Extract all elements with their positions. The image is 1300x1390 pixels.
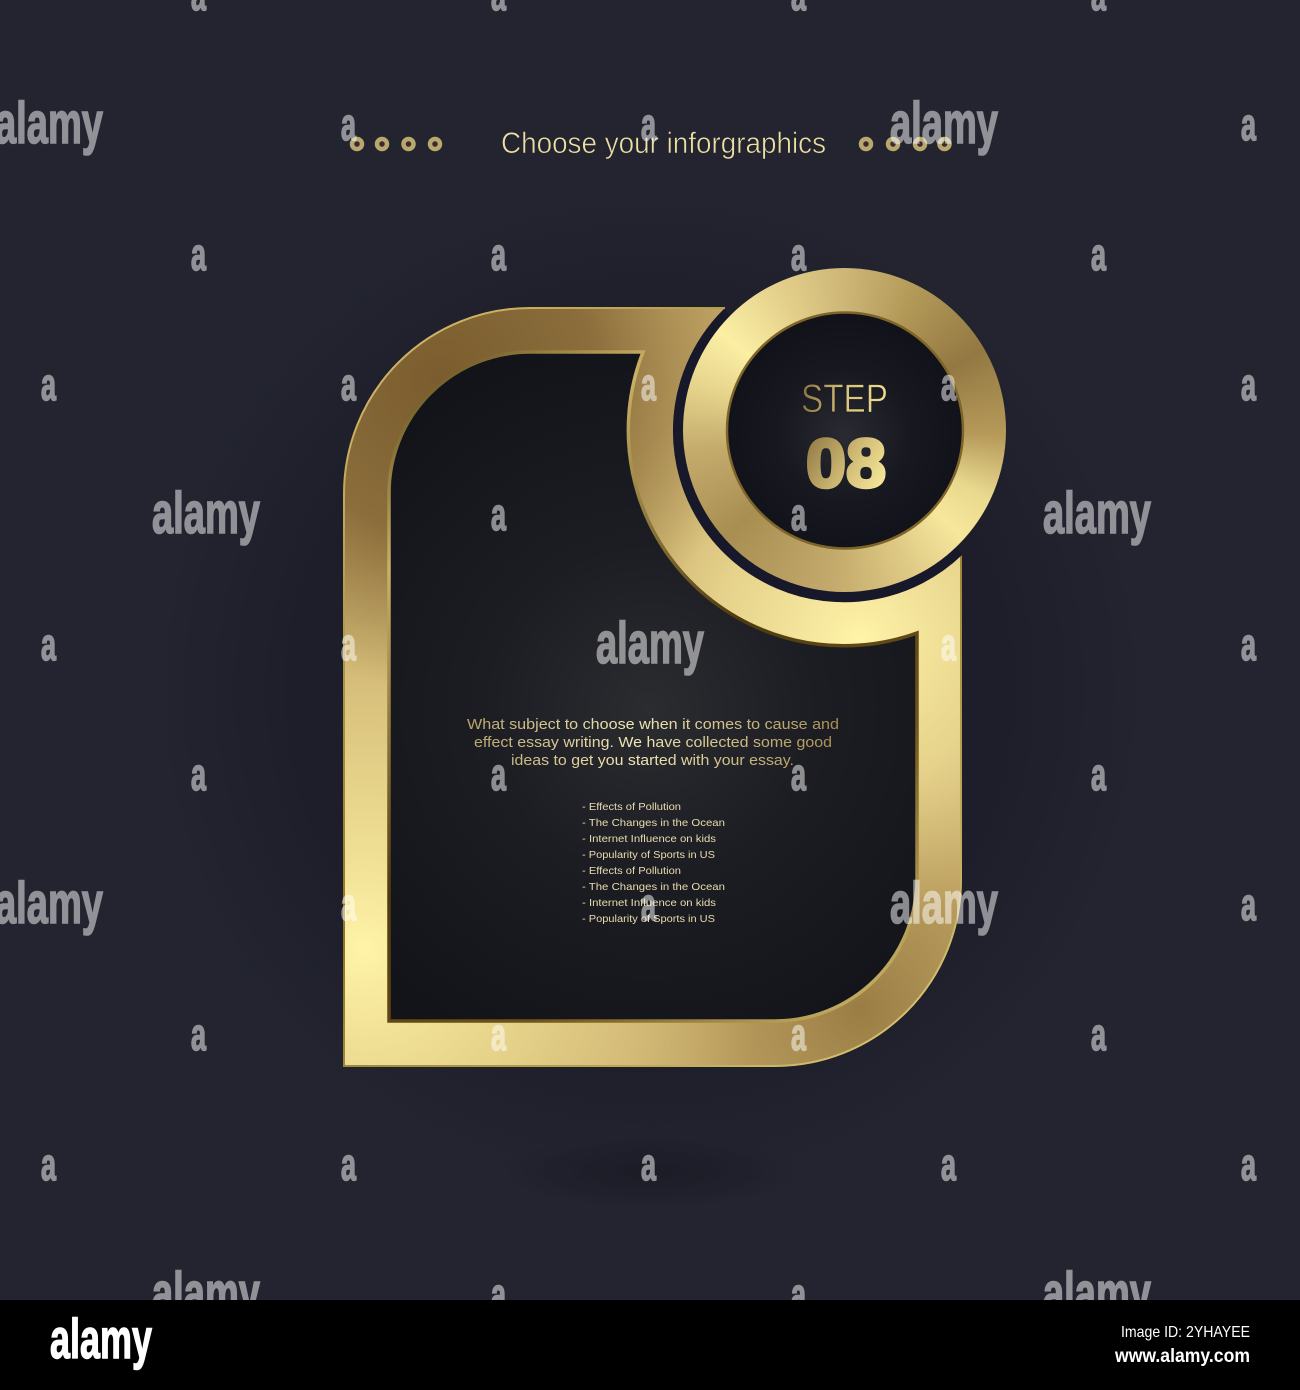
watermark: stock photo marks: a (1091, 229, 1107, 280)
watermark: stock photo marks: a (191, 229, 207, 280)
watermark: stock photo marks: a (491, 749, 507, 800)
watermark: stock photo marks: alamy (152, 481, 260, 546)
gold frame (340, 300, 970, 1070)
frame inner bevel (389, 352, 917, 1021)
watermark: stock photo marks: alamy (890, 871, 998, 936)
topic list: - The Changes in the Ocean (582, 881, 725, 893)
watermark: stock photo marks: alamy (890, 91, 998, 156)
watermark: stock photo marks: a (1091, 1009, 1107, 1060)
watermark: stock photo marks: a (791, 1009, 807, 1060)
watermark: stock photo marks: a (1241, 879, 1257, 930)
footer logo: alamy (50, 1307, 152, 1370)
watermark: stock photo marks: a (1241, 99, 1257, 150)
footer bar (0, 1300, 1300, 1390)
watermark: stock photo marks: a (491, 229, 507, 280)
description paragraph: ideas to get you started with your essay. (511, 753, 794, 769)
watermark: stock photo marks: a (941, 619, 957, 670)
watermark: stock photo marks: a (191, 1009, 207, 1060)
topic list: - Effects of Pollution (582, 801, 681, 813)
watermark: stock photo marks: a (41, 359, 57, 410)
description paragraph: What subject to choose when it comes to cause and (467, 717, 839, 733)
watermark: stock photo marks: a (791, 749, 807, 800)
website: www.alamy.com (1114, 1346, 1250, 1367)
heading row (352, 127, 950, 160)
watermark: stock photo marks: a (341, 619, 357, 670)
watermark: stock photo marks: a (41, 1139, 57, 1190)
watermark: stock photo marks: a (341, 99, 357, 150)
watermark: stock photo marks: a (1241, 359, 1257, 410)
image id: Image ID: 2YHAYEE (1121, 1324, 1250, 1341)
watermark: stock photo marks: a (491, 1009, 507, 1060)
left dots (352, 139, 440, 149)
watermark: stock photo marks: a (491, 1269, 507, 1320)
ground shadow (480, 1130, 820, 1214)
gap ring (678, 313, 959, 597)
topic list (582, 801, 725, 925)
topic list: - Internet Influence on kids (582, 833, 716, 845)
frame outer edge (344, 308, 961, 1066)
watermark: stock photo marks: a (641, 879, 657, 930)
watermark: stock photo marks: a (191, 749, 207, 800)
watermark: stock photo marks: a (1241, 619, 1257, 670)
topic list: - Internet Influence on kids (582, 897, 716, 909)
topic list: - Effects of Pollution (582, 865, 681, 877)
topic list: - The Changes in the Ocean (582, 817, 725, 829)
step label: STEP (801, 377, 888, 421)
watermark: stock photo marks: alamy (1043, 481, 1151, 546)
badge gold ring (683, 268, 1006, 592)
watermark: stock photo marks: alamy (596, 611, 704, 676)
badge: step number (683, 268, 1006, 592)
watermark: stock photo marks: a (641, 1139, 657, 1190)
watermark: stock photo marks: a (341, 359, 357, 410)
title: Choose your inforgraphics (501, 127, 826, 160)
right dots (861, 139, 950, 149)
badge centre disc (727, 312, 963, 548)
watermark: stock photo marks: a (1241, 1139, 1257, 1190)
watermark: stock photo marks: a (341, 1139, 357, 1190)
watermark: stock photo marks: a (941, 1139, 957, 1190)
watermark: stock photo marks: a (641, 99, 657, 150)
watermark: stock photo marks: alamy (1043, 1261, 1151, 1326)
panel: text frame (340, 300, 970, 1070)
watermark: stock photo marks: a (791, 1269, 807, 1320)
watermark: stock photo marks: a (791, 489, 807, 540)
topic list: - Popularity of Sports in US (582, 913, 715, 925)
description paragraph: effect essay writing. We have collected some good (474, 735, 832, 751)
watermark: stock photo marks: a (941, 359, 957, 410)
topic list: - Popularity of Sports in US (582, 849, 715, 861)
step number: 08 (806, 425, 886, 502)
description paragraph (467, 717, 839, 769)
watermark: stock photo marks: a (791, 229, 807, 280)
panel interior (389, 352, 917, 1021)
watermark: stock photo marks: a (491, 489, 507, 540)
watermark: stock photo marks: alamy (152, 1261, 260, 1326)
watermark: stock photo marks: a (1091, 749, 1107, 800)
watermark: stock photo marks: a (41, 619, 57, 670)
watermark: stock photo marks: a (641, 359, 657, 410)
watermark: stock photo marks: a (341, 879, 357, 930)
